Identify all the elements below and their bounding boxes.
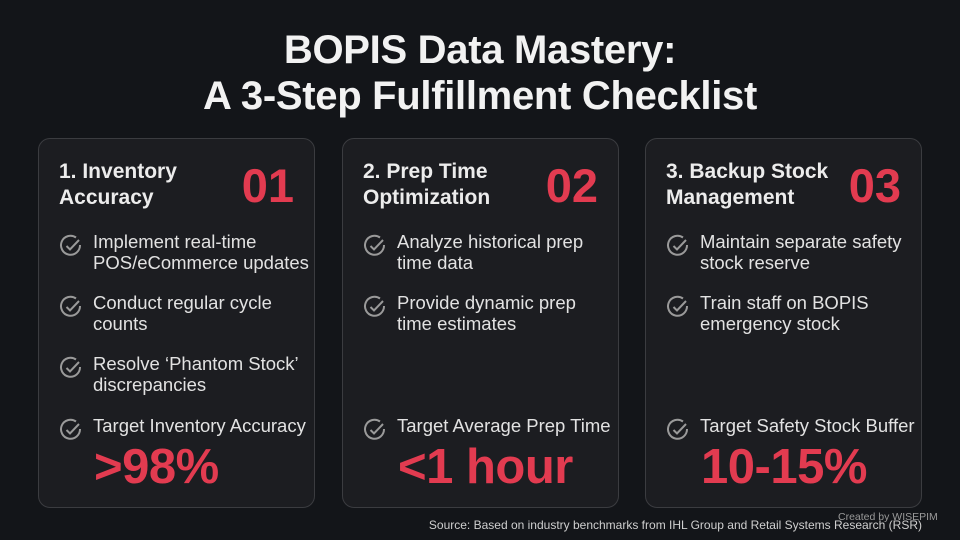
title: A 3-Step Fulfillment Checklist (203, 74, 757, 118)
heading: 2. Prep Time (363, 160, 488, 183)
source note: Source: Based on industry benchmarks from IHL Group and Retail Systems Research (RSR) (429, 518, 922, 532)
panel: prep time (342, 138, 619, 508)
bullet: Resolve ‘Phantom Stock’ (93, 353, 299, 374)
bullet (666, 231, 902, 273)
target bullet: Target Average Prep Time (397, 415, 611, 436)
bullet (666, 292, 869, 334)
heading: Management (666, 186, 794, 209)
target value: <1 hour (398, 440, 573, 494)
bullet: Implement real-time (93, 231, 256, 252)
target bullet: Target Inventory Accuracy (93, 415, 306, 436)
bullet (364, 292, 576, 334)
bullet: POS/eCommerce updates (93, 252, 309, 273)
target value: >98% (94, 440, 219, 494)
bullet (60, 292, 272, 334)
bullet: stock reserve (700, 252, 810, 273)
credit: Created by WISEPIM (838, 511, 938, 523)
bullet: Provide dynamic prep (397, 292, 576, 313)
bullet: counts (93, 313, 148, 334)
heading (363, 160, 490, 209)
bullet: emergency stock (700, 313, 840, 334)
heading: 1. Inventory (59, 160, 177, 183)
bullet: Maintain separate safety (700, 231, 902, 252)
bullet: Analyze historical prep (397, 231, 583, 252)
bullet: time data (397, 252, 473, 273)
bullet: Train staff on BOPIS (700, 292, 869, 313)
title (203, 28, 757, 118)
target value: 10-15% (701, 440, 867, 494)
heading (59, 160, 177, 209)
heading (666, 160, 828, 209)
title: BOPIS Data Mastery: (284, 28, 676, 72)
heading: Optimization (363, 186, 490, 209)
bullet: discrepancies (93, 374, 206, 395)
bullet: time estimates (397, 313, 516, 334)
heading: Accuracy (59, 186, 154, 209)
bullet: Conduct regular cycle (93, 292, 272, 313)
target bullet: Target Safety Stock Buffer (700, 415, 915, 436)
bullet (364, 231, 583, 273)
panel: backup stock (645, 138, 922, 508)
bullet (60, 353, 299, 395)
step number: 03 (849, 159, 901, 212)
step number: 02 (546, 159, 598, 212)
panel: inventory accuracy (38, 138, 315, 508)
step number: 01 (242, 159, 294, 212)
heading: 3. Backup Stock (666, 160, 828, 183)
bullet (60, 231, 309, 273)
